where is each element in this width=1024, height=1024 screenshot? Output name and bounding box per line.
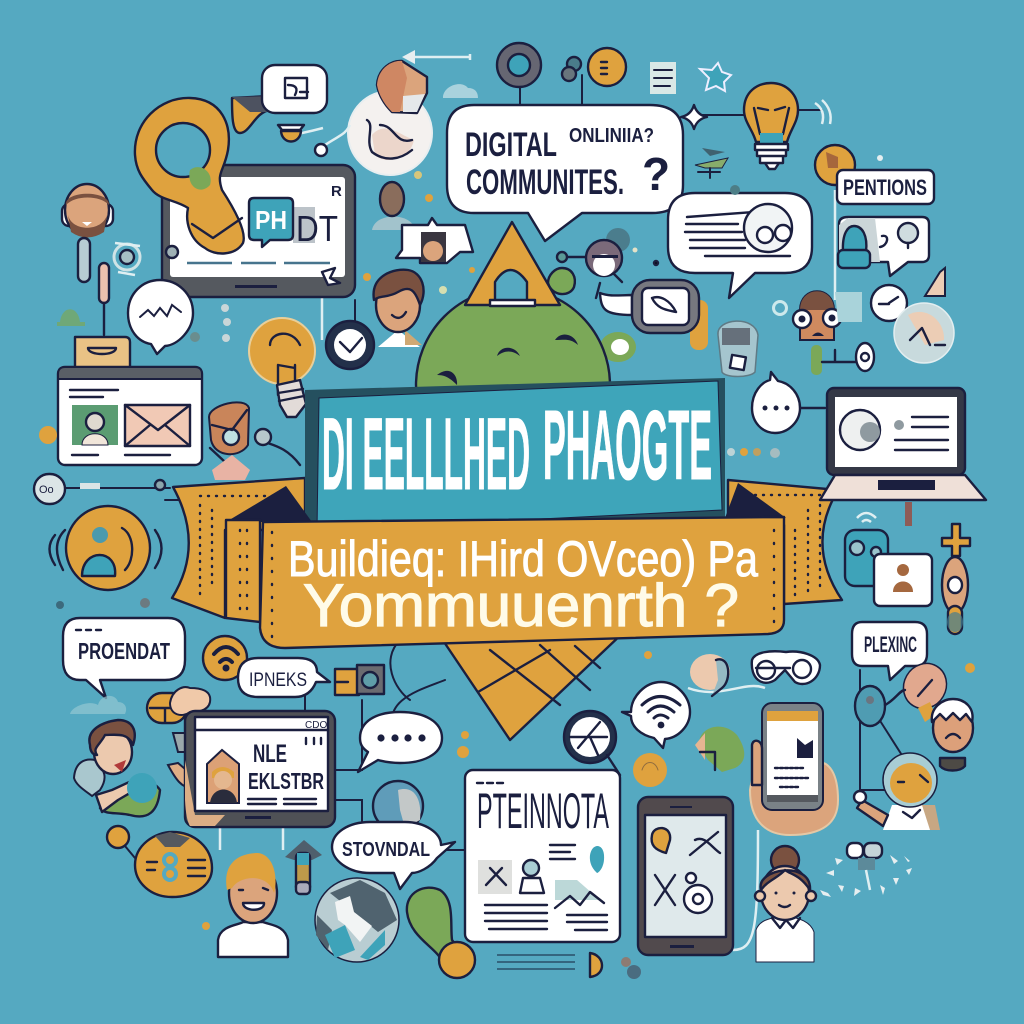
wifi coin — [203, 636, 247, 680]
speech bubble: digital communities: COMMUNITES. — [466, 163, 624, 202]
avatar: white hair head — [932, 699, 973, 770]
bubble: plexinc: PLEXINC — [864, 632, 917, 657]
top arrow and cloud — [402, 50, 478, 98]
bottom diamonds — [440, 630, 626, 740]
avatar: laughing person — [74, 720, 160, 816]
avatar: man with beard and headphones — [62, 184, 113, 238]
icon: speech box with document — [232, 65, 327, 142]
document shadow and half coin — [497, 953, 641, 979]
ochre ribbon front — [226, 483, 786, 648]
coin and green head — [633, 727, 744, 787]
tubes and gear — [57, 238, 140, 335]
bubble: lines and glasses — [668, 193, 812, 298]
ribbon back tails — [172, 478, 842, 618]
browser window with envelope — [58, 367, 202, 465]
avatar: astronaut — [854, 753, 940, 830]
clock and photo circle — [774, 268, 954, 363]
scattered dots — [56, 155, 975, 930]
icon: light bulb lower left — [249, 318, 315, 417]
target icon — [497, 43, 541, 87]
right side gadgets — [845, 513, 970, 634]
camera icon — [335, 665, 384, 695]
photo circle and stovndal bubble — [332, 781, 455, 889]
teal title banner — [305, 378, 725, 530]
pentions label with coin — [815, 145, 934, 204]
tablet with profile — [185, 711, 335, 827]
wires white — [220, 128, 835, 950]
globe puzzle — [315, 878, 399, 962]
hand holding phone — [750, 703, 838, 835]
wifi circle bubble: Oo — [39, 484, 54, 496]
ochre ribbon front: Yommuuenrth ? — [303, 572, 739, 639]
device with white arm and green nodes — [548, 268, 708, 362]
bubble: typing dots — [358, 712, 442, 772]
speech bubble: digital communities: ONLINIIA? — [569, 125, 654, 147]
tablet with profile: NLE — [253, 740, 287, 768]
circle person icon — [50, 506, 162, 590]
tablet text: DT — [296, 208, 338, 249]
tablet with profile: EKLSTBR — [248, 768, 324, 794]
bubble: ipneks — [238, 658, 330, 697]
speech bubble: digital communities — [447, 105, 683, 241]
newspaper: PTEINNOTA — [477, 783, 609, 839]
ochre coin and nodes — [562, 48, 626, 86]
speech bubble: digital communities: ? — [642, 148, 670, 200]
bubble: line chart — [128, 280, 193, 354]
torch icon — [285, 840, 322, 894]
bubble: dots right — [752, 372, 825, 433]
panel: tablet with PH bubble — [162, 165, 355, 297]
PH speech bubble — [249, 198, 293, 247]
mushroom icon — [695, 148, 728, 178]
PH speech bubble: PH — [255, 205, 287, 235]
avatar: person with visor — [557, 228, 630, 298]
avatar: angry orange head — [209, 402, 300, 480]
avatar: woman with bun — [755, 846, 816, 962]
speech bubble: digital communities: DIGITAL — [465, 126, 557, 164]
icon: light bulb upper right — [681, 83, 831, 169]
photo bubble — [396, 218, 473, 263]
fist icon — [147, 687, 210, 788]
icon: ochre ring blob — [135, 98, 244, 253]
avatar: small person — [372, 182, 415, 230]
ochre ribbon front: Buildieq: IHird OVceo) Pa — [288, 531, 758, 587]
smartphone with sketches — [638, 797, 733, 955]
bubble: proendat: PROENDAT — [78, 638, 170, 664]
robot figure — [718, 321, 758, 376]
laptop — [820, 388, 986, 526]
globe with triangle — [416, 222, 610, 482]
bubble: ipneks: IPNEKS — [249, 670, 307, 691]
text: PHAOGTE — [543, 390, 712, 500]
avatar: bottom man — [218, 853, 288, 957]
note and star icons — [650, 62, 731, 94]
avatar: smiling brown-haired man — [374, 270, 424, 347]
tablet with profile: CDO — [305, 720, 327, 731]
peach node with link — [855, 656, 955, 726]
peach bubble and goggles — [690, 651, 820, 696]
newspaper — [465, 770, 620, 942]
bubble: proendat — [63, 618, 185, 698]
folder icon — [75, 337, 130, 368]
small glyph R: R — [331, 183, 342, 200]
wifi circle bubble — [34, 426, 165, 504]
network coin cookie — [107, 826, 212, 897]
avatar: face with big eyes — [793, 291, 874, 375]
photo circle and stovndal bubble: STOVNDAL — [342, 839, 430, 861]
cluster binoculars — [820, 843, 912, 897]
green blob with coin — [407, 888, 475, 978]
pentions label with coin: PENTIONS — [843, 175, 927, 200]
bubble: robot and balloon — [838, 217, 929, 276]
bubble: plexinc — [852, 612, 963, 680]
magnifier — [564, 711, 620, 775]
portrait with globe circle — [315, 61, 432, 175]
teal title banner: DI EELLLHED — [322, 397, 530, 511]
bubble: wifi — [622, 682, 690, 748]
clock icon — [326, 321, 374, 369]
